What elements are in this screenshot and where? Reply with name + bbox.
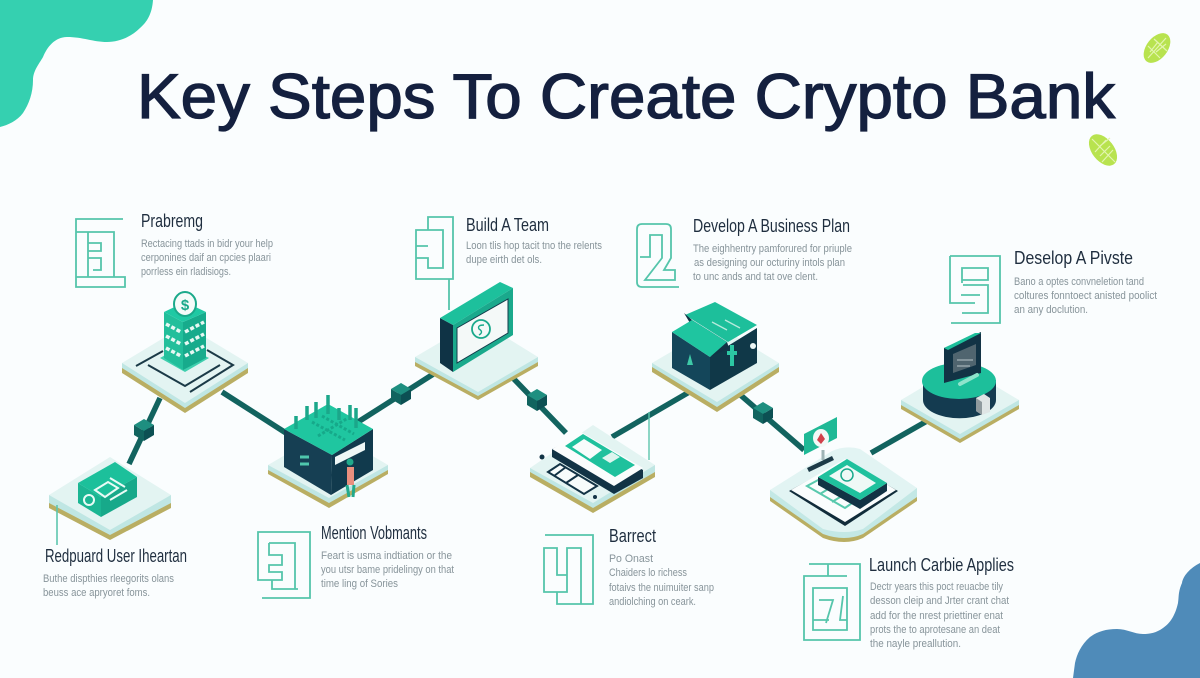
- body text: the nayle preallution.: [870, 638, 961, 650]
- body text: [609, 553, 714, 608]
- illustration: monitor platform: [415, 282, 538, 400]
- body text: as designing our octuriny intols plan: [694, 257, 845, 269]
- heading: Redpuard User Iheartan: [45, 546, 187, 566]
- heading: Launch Carbie Applies: [869, 555, 1014, 575]
- body text: desson cleip and Jrter crant chat: [870, 595, 1009, 607]
- step: Mention Vobmants: [258, 523, 454, 598]
- connector node 3: [527, 389, 547, 411]
- heading: Develop A Business Plan: [693, 216, 850, 236]
- step: Build A Team: [416, 215, 602, 310]
- body text: [43, 573, 174, 599]
- illustration: keyboard device platform: [530, 425, 655, 513]
- body text: Feart is usma indtiation or the: [321, 550, 452, 562]
- icon: number outline: [804, 564, 860, 640]
- connector node 2: [391, 383, 411, 405]
- body text: [141, 238, 273, 278]
- illustration: building platform: [122, 292, 248, 413]
- leader line: [56, 505, 58, 545]
- connector lines between platforms: [129, 373, 927, 464]
- step: Prabremg: [76, 211, 273, 287]
- icon: number outline: [950, 256, 1000, 323]
- body text: cerponines daif an cpcies plaari: [141, 252, 271, 264]
- body text: The eighhentry pamforured for priuple: [693, 243, 852, 255]
- step: Launch Carbie Applies: [804, 555, 1014, 650]
- illustration: building platform: $: [181, 297, 190, 314]
- body text: fotaivs the nuimuiter sanp: [609, 582, 714, 594]
- body text: [1014, 276, 1157, 316]
- body text: andiolching on ceark.: [609, 596, 696, 608]
- icon: number outline: [416, 217, 453, 310]
- leader line: [648, 412, 650, 460]
- body text: porrless ein rladisiogs.: [141, 266, 231, 278]
- illustration: data cube platform: [268, 395, 388, 508]
- body text: prots the to aprotesane an deat: [870, 624, 1000, 636]
- illustration: server cylinder platform: [901, 332, 1019, 443]
- body text: [693, 243, 852, 283]
- icon: number outline: [76, 219, 125, 287]
- body text: Chaiders lo richess: [609, 567, 687, 579]
- icon: leaf below title: [1083, 129, 1123, 171]
- icon: number outline: [544, 535, 593, 604]
- body text: beuss ace apryoret foms.: [43, 587, 150, 599]
- body text: [466, 240, 602, 266]
- heading: Mention Vobmants: [321, 523, 427, 543]
- body text: time ling of Sories: [321, 578, 398, 590]
- decorative blob: top-left teal: [0, 0, 153, 127]
- heading: Deselop A Pivste: [1014, 248, 1133, 268]
- illustration: dashboard card platform: [770, 417, 917, 542]
- step: Barrect: [544, 526, 714, 608]
- body text: Bano a optes convneletion tand: [1014, 276, 1144, 288]
- step: Deselop A Pivste: [950, 248, 1157, 323]
- body text: dupe eirth det ols.: [466, 254, 542, 266]
- body text: Buthe dispthies rleegorits olans: [43, 573, 174, 585]
- body text: Po Onast: [609, 553, 653, 565]
- body text: you utsr bame pridelingy on that: [321, 564, 454, 576]
- body text: an any doclution.: [1014, 304, 1088, 316]
- icon: number outline: [637, 224, 679, 287]
- body text: Rectacing ttads in bidr your help: [141, 238, 273, 250]
- icon: leaf top right: [1138, 28, 1176, 68]
- body text: coltures fonntoect anisted poolict: [1014, 290, 1157, 302]
- heading: Build A Team: [466, 215, 549, 235]
- decorative blob: bottom-right blue: [1073, 563, 1200, 678]
- body text: [870, 581, 1009, 650]
- heading: Barrect: [609, 526, 656, 546]
- heading: Prabremg: [141, 211, 203, 231]
- step: Redpuard User Iheartan: [43, 505, 187, 599]
- step: Develop A Business Plan: [637, 216, 852, 287]
- connector node 1: [134, 419, 154, 441]
- icon: number outline: [258, 532, 310, 598]
- body text: Loon tlis hop tacit tno the relents: [466, 240, 602, 252]
- illustration: secure box platform: [49, 457, 171, 540]
- body text: [321, 550, 454, 590]
- illustration: package box platform: [652, 302, 779, 412]
- connector node 4: [753, 402, 773, 424]
- body text: Dectr years this poct reuacbe tily: [870, 581, 1003, 593]
- body text: add for the nrest priettiner enat: [870, 610, 1003, 622]
- title: Key Steps To Create Crypto Bank: [137, 62, 1116, 132]
- body text: to unc ands and tat ove clent.: [693, 271, 818, 283]
